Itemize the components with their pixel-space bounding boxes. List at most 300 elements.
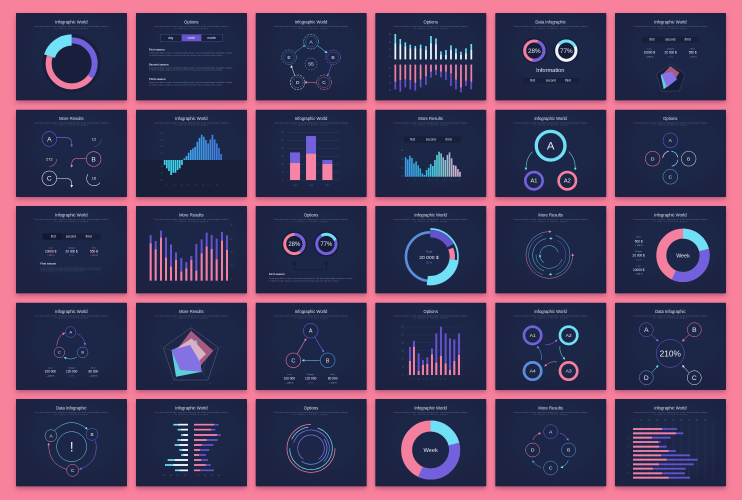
subtitle (34, 315, 109, 320)
stats: 20 000 $ (665, 51, 677, 55)
text block: second season: et dolore magna aliqua ut enim ad minim veniam quis nostrud exercitation (149, 69, 223, 72)
axis labels: 10 (161, 153, 163, 155)
stats: Next (91, 366, 96, 369)
axis labels: 90 (704, 420, 706, 422)
axis labels: 60 (680, 420, 682, 422)
axis labels: 3 (181, 184, 182, 186)
hub labels (644, 327, 697, 382)
values: 12 (92, 136, 97, 141)
node labels: 55 (308, 62, 314, 68)
stats: + 240 % (645, 56, 653, 58)
title: More Results (179, 212, 204, 217)
hub labels: A (644, 327, 649, 334)
panel: butterfly bars (136, 399, 247, 486)
stats: + 120 % (89, 375, 97, 377)
axis labels: 4 (422, 379, 423, 381)
axis labels: 60 (231, 238, 233, 240)
subtitle: Lorem ipsum dolor sit amet, consectetur adipiscing elit, sed do eiusmod tempor incididunt (394, 315, 468, 318)
axis labels (231, 225, 233, 281)
subtitle (514, 411, 588, 416)
subtitle: Lorem ipsum dolor sit amet, consectetur adipiscing elit, sed do eiusmod tempor incididunt (394, 218, 468, 221)
subtitle (274, 411, 349, 416)
axis labels: 3 (418, 379, 419, 381)
bar chart (406, 152, 460, 177)
axis labels: 0 (402, 375, 403, 377)
subtitle: Lorem ipsum dolor sit amet, consectetur adipiscing elit, sed do eiusmod tempor incididunt (34, 218, 109, 221)
tabs (160, 34, 223, 41)
node labels: C (58, 350, 61, 355)
node labels: A (47, 136, 52, 143)
axis labels: 5 (195, 184, 197, 186)
tabs: second (426, 138, 436, 142)
stacked column chart (287, 132, 340, 180)
axis labels: 6 (431, 379, 432, 381)
axis labels: 20 (161, 146, 163, 148)
panel: stacked thin columns (375, 303, 486, 390)
axis labels: 6 (444, 180, 445, 182)
title: Infographic World (414, 212, 448, 217)
tabs: third (446, 138, 452, 142)
node labels (58, 329, 84, 355)
horizontal bar chart (633, 423, 713, 479)
axis labels: 20 (204, 475, 206, 477)
text block: third season (149, 77, 232, 86)
stats: Budget (667, 47, 674, 50)
node labels: C (291, 358, 295, 364)
stats: + 120 % (689, 56, 697, 58)
axis labels: 1 (628, 429, 629, 431)
node labels: C (47, 176, 52, 183)
hub labels: B (692, 327, 697, 334)
stats (633, 236, 645, 276)
axis labels: 20 (389, 75, 391, 77)
axis labels: 2017 (325, 185, 329, 187)
stats (284, 373, 338, 384)
axis labels: 20 (401, 167, 403, 169)
axis labels: 10 (401, 176, 403, 178)
title: More Results (538, 212, 563, 217)
axis labels: 40 (402, 342, 404, 344)
subtitle (633, 411, 708, 416)
axis labels: 2 (174, 184, 175, 186)
text block: first season: First season (149, 48, 165, 52)
node labels: A1 (530, 333, 536, 339)
subtitle (154, 411, 229, 416)
axis labels: 4 (188, 184, 189, 186)
title: Infographic World (55, 19, 88, 24)
stats: + 120 % (329, 382, 337, 384)
node labels: C (669, 174, 673, 180)
tabs: first (649, 38, 655, 42)
subtitle: ut labore et dolore magna (654, 220, 687, 223)
axis labels: 2 (414, 180, 415, 182)
stats: 550 $ (90, 250, 98, 254)
subtitle: ut labore et dolore magna (55, 124, 88, 127)
subtitle: ut labore et dolore magna (294, 124, 328, 127)
node labels (291, 329, 330, 364)
subtitle: Lorem ipsum dolor sit amet, consectetur adipiscing elit, sed do eiusmod tempor incididunt (394, 122, 468, 125)
axis labels: 4 (221, 346, 222, 348)
axis labels: 3 (422, 180, 423, 182)
axis labels: 8 (216, 184, 218, 186)
axis labels: 7 (436, 379, 437, 381)
axis labels: 80 (231, 225, 233, 227)
node labels: A2 (564, 179, 571, 185)
stats: Next (330, 373, 335, 376)
subtitle: Lorem ipsum dolor sit amet, consectetur adipiscing elit, sed do eiusmod tempor incididunt (154, 25, 229, 28)
node labels: A3 (566, 369, 572, 375)
panel: exclamation cycle (16, 399, 127, 486)
stats: 12 % (636, 259, 641, 261)
subtitle (394, 122, 468, 127)
subtitle: ut labore et dolore magna (414, 27, 447, 30)
panel: four node loop (495, 399, 606, 486)
tree diagram (525, 131, 576, 189)
panel: two gauges with season text (256, 206, 367, 293)
node labels: B (91, 156, 96, 163)
panel: large radar chart (136, 303, 247, 390)
axis labels: 2 (171, 383, 173, 385)
left bars (165, 425, 188, 470)
hub labels: C (692, 375, 697, 382)
axis labels (163, 475, 220, 477)
title: Infographic World (295, 309, 328, 314)
node labels: C (71, 468, 75, 473)
subtitle (394, 315, 468, 320)
subtitle (514, 218, 588, 223)
node labels (531, 429, 571, 472)
subtitle (394, 25, 468, 30)
subtitle: ut labore et dolore magna (175, 124, 208, 127)
node labels: B (90, 432, 94, 437)
text block: first season: First season (269, 272, 285, 276)
gauge 28%: 28% (288, 242, 301, 248)
stats: 12 % (69, 375, 74, 377)
subtitle (274, 218, 349, 223)
gauge 28%: 28% (528, 48, 541, 55)
stats: 500 $ (635, 239, 643, 243)
subtitle: Lorem ipsum dolor sit amet, consectetur adipiscing elit, sed do eiusmod tempor incididunt (633, 218, 708, 221)
subtitle: ut labore et dolore magna (654, 27, 687, 30)
subtitle (274, 25, 349, 30)
panel: 210% hub (615, 303, 726, 390)
axis labels: 30 (402, 350, 404, 352)
subtitle: Lorem ipsum dolor sit amet, consectetur adipiscing elit, sed do eiusmod tempor incididunt (514, 411, 588, 414)
panel: triangle flow with stats (256, 303, 367, 390)
axis labels: 60 (282, 132, 284, 134)
triangle diagram (286, 323, 335, 368)
title: More Results (179, 309, 204, 314)
stats (45, 246, 98, 257)
axis labels: 40 (389, 34, 391, 36)
panel: mirrored bar chart (375, 13, 486, 100)
stats: 100 000 (45, 370, 56, 374)
axis labels: 10 (640, 420, 642, 422)
text block: first season (40, 261, 101, 273)
axis labels: 2 (413, 379, 414, 381)
title: Infographic World (654, 19, 687, 24)
stats: Last (287, 373, 292, 376)
panel: A B C flows (16, 110, 127, 197)
axis labels: 3 (209, 383, 211, 385)
axis labels: 20 (231, 265, 233, 267)
title: Infographic World (295, 116, 328, 121)
axis labels: 30 (401, 159, 403, 161)
panel: stacked columns (256, 110, 367, 197)
lower band (136, 160, 247, 197)
subtitle (633, 315, 708, 320)
axis labels: 4 (429, 180, 430, 182)
axis labels: 8 (458, 180, 459, 182)
subtitle: Lorem ipsum dolor sit amet, consectetur adipiscing elit, sed do eiusmod tempor incididunt (633, 411, 708, 414)
subtitle (274, 122, 349, 127)
subtitle: ut labore et dolore magna (55, 317, 88, 320)
subtitle (633, 122, 708, 127)
subtitle (394, 411, 468, 416)
title: More Results (418, 116, 443, 121)
node labels (531, 141, 571, 185)
subtitle: ut labore et dolore magna (534, 27, 567, 30)
axis labels: 20 (648, 420, 650, 422)
node labels: B (567, 448, 571, 454)
stats: 120 000 (305, 377, 317, 381)
axis labels: 30 (656, 420, 658, 422)
tabs: first (51, 235, 56, 239)
panel: large week donut (375, 399, 486, 486)
text block: first season: First season (40, 261, 56, 265)
text block: third season: Lorem ipsum dolor sit amet, consectetur adipiscing elit, sed do eiusmod tempor incididunt ut labore (149, 81, 232, 84)
stats: Next (636, 236, 641, 239)
axis labels: 20 (402, 358, 404, 360)
tabs: month (207, 36, 216, 40)
axis labels: 2015 (293, 185, 297, 187)
subtitle: Lorem ipsum dolor sit amet, consectetur adipiscing elit, sed do eiusmod tempor incididunt (633, 122, 708, 125)
axis labels (389, 34, 391, 92)
stats: 12 % (69, 255, 74, 257)
stats (45, 366, 98, 377)
tabs: third (565, 79, 571, 83)
axis labels: 7 (628, 455, 629, 457)
cycle diagram (282, 34, 340, 90)
node labels: C (322, 80, 326, 86)
axis labels: 30 (161, 139, 163, 141)
text block: first season: Lorem ipsum dolor sit amet, consectetur adipiscing elit, sed do eiusmod tempor incididunt ut labore (149, 52, 232, 55)
node labels: A (549, 429, 553, 435)
stats: 20 000 $ (633, 254, 645, 258)
subtitle (154, 122, 229, 127)
subtitle: ut labore et dolore magna (534, 220, 567, 223)
title: Infographic World (414, 405, 448, 410)
subtitle: Lorem ipsum dolor sit amet, consectetur adipiscing elit, sed do eiusmod tempor incididunt (274, 315, 349, 318)
panel: A splits into A1 and A2 (495, 110, 606, 197)
subtitle: Lorem ipsum dolor sit amet, consectetur adipiscing elit, sed do eiusmod tempor incididunt (514, 315, 588, 318)
node labels: A (309, 329, 313, 335)
subtitle: Lorem ipsum dolor sit amet, consectetur adipiscing elit, sed do eiusmod tempor incididunt (154, 122, 229, 125)
title: Data Infographic (655, 309, 686, 314)
title: Options (184, 19, 198, 24)
hub labels: 210% (660, 348, 682, 358)
text block: first season: Lorem ipsum dolor sit amet, consectetur adipiscing elit, sed do eiusmod (40, 266, 101, 269)
axis labels: 50 (402, 335, 404, 337)
node labels: A (49, 433, 53, 438)
axis labels: 0 (282, 180, 283, 182)
subtitle: ut labore et dolore magna (414, 317, 447, 320)
panel: four ring cycle (495, 303, 606, 390)
axis labels: 5 (427, 379, 428, 381)
axis labels: 2016 (309, 185, 313, 187)
text block: second season (149, 62, 232, 72)
center stats: 20 000 $ (419, 255, 439, 261)
axis labels: 20 (282, 164, 284, 166)
axis labels: 0 (633, 420, 634, 422)
donut chart (661, 234, 705, 277)
axis labels (161, 133, 218, 186)
node labels: A (309, 39, 313, 45)
tabs: day (168, 36, 174, 40)
panel: positive negative bars (136, 110, 247, 197)
cycle diagram (54, 327, 88, 359)
radar chart (656, 64, 685, 91)
stats: Last (637, 264, 641, 267)
axis labels: 30 (161, 179, 163, 181)
subtitle: ut labore et dolore magna (294, 220, 328, 223)
bar chart (165, 135, 221, 175)
tabs: first (530, 79, 535, 83)
stats: Budget (68, 246, 75, 249)
axis labels: 70 (688, 420, 690, 422)
title: Infographic World (295, 19, 328, 24)
text block: second season: Lorem ipsum dolor sit amet, consectetur adipiscing elit, sed do eiusmod tempor incididunt ut labore (149, 66, 232, 69)
cycle diagram (45, 423, 98, 476)
node labels: B (326, 358, 330, 364)
stats: 10000 $ (45, 250, 57, 254)
subtitle: Lorem ipsum dolor sit amet, consectetur adipiscing elit, sed do eiusmod tempor incididunt (514, 122, 588, 125)
node labels: E (287, 55, 291, 61)
text block: first season (269, 272, 353, 282)
tabs (642, 37, 699, 43)
stats: 20 000 $ (66, 250, 78, 254)
subtitle: Lorem ipsum dolor sit amet, consectetur adipiscing elit, sed do eiusmod tempor incididunt (274, 411, 349, 414)
panel: four nodes around arcs (615, 110, 726, 197)
panel: stats and week donut (615, 206, 726, 293)
axis labels: 0 (231, 279, 232, 281)
axis labels: 30 (389, 41, 391, 43)
subtitle: ut labore et dolore magna (294, 317, 328, 320)
stats: Budget (307, 373, 315, 376)
stats: + 240 % (285, 382, 293, 384)
subtitle: ut labore et dolore magna (414, 220, 447, 223)
title: More Results (538, 405, 563, 410)
node labels: C (549, 466, 553, 472)
axis labels (402, 327, 446, 381)
title: Options (423, 19, 438, 24)
subtitle: Lorem ipsum dolor sit amet, consectetur adipiscing elit, sed do eiusmod tempor incididunt (633, 315, 708, 318)
text block: first season: tempor incididunt ut labore et dolore magna aliqua ut enim ad minim (40, 268, 101, 271)
subtitle (514, 25, 588, 30)
node labels: A2 (566, 333, 572, 339)
stats: 10000 $ (633, 268, 645, 272)
node labels: B (687, 156, 691, 162)
panel: two ring gauges (495, 13, 606, 100)
axis labels: 7 (209, 184, 211, 186)
axis labels: 40 (161, 133, 163, 135)
node labels: B (81, 350, 84, 355)
title: More Results (59, 116, 84, 121)
subtitle: Lorem ipsum dolor sit amet, consectetur adipiscing elit, sed do eiusmod tempor incididunt (34, 25, 109, 28)
stacked bar chart (151, 231, 227, 281)
tabs (404, 136, 461, 143)
subtitle: Lorem ipsum dolor sit amet, consectetur adipiscing elit, sed do eiusmod tempor incididunt (633, 25, 708, 28)
title: Infographic World (534, 116, 568, 121)
subtitle: ut labore et dolore magna (175, 413, 208, 416)
panel: large stacked bars (136, 206, 247, 293)
stats: 120 000 (66, 370, 78, 374)
center stats: 25 % (426, 260, 433, 264)
axis labels: 10 (282, 172, 284, 174)
ring chart (287, 424, 335, 472)
subtitle (34, 25, 109, 30)
stats: Last (48, 366, 53, 369)
title: Data Infographic (535, 19, 566, 24)
node labels: A (547, 141, 555, 153)
gauge 77%: 77% (560, 48, 573, 55)
node labels: A1 (531, 179, 537, 185)
stats (644, 47, 697, 58)
axis labels: 7 (451, 180, 452, 182)
axis labels: 5 (190, 325, 192, 327)
panel: concentric arrow circles (495, 206, 606, 293)
stats: Last (49, 246, 53, 249)
subtitle (34, 411, 109, 416)
text block: third season: Third season (149, 77, 166, 81)
node labels: A (669, 138, 673, 144)
tabs: third (685, 38, 691, 42)
donut center label: Week (676, 253, 690, 259)
tabs: second (546, 79, 556, 83)
tabs: first (410, 138, 415, 142)
stats: Budget (68, 366, 75, 369)
title: Infographic World (654, 212, 687, 217)
node labels (49, 432, 94, 473)
tabs: week (188, 36, 195, 40)
subtitle (514, 122, 588, 127)
axis labels: 50 (672, 420, 674, 422)
stats: Next (92, 246, 97, 249)
values (46, 136, 97, 181)
axis labels: 10 (402, 366, 404, 368)
text block: first season: veniam quis nostrud exercitation ullamco (40, 270, 84, 273)
donut chart (42, 34, 101, 93)
subtitle: ut labore et dolore magna (414, 413, 447, 416)
axis labels: 6 (202, 184, 204, 186)
title: Infographic World (55, 212, 88, 217)
right bars (194, 425, 221, 470)
subtitle (154, 218, 229, 223)
axis labels (627, 420, 706, 475)
axis labels (160, 325, 222, 385)
node labels (47, 136, 96, 183)
stats: 80 000 (88, 370, 98, 374)
subtitle (394, 218, 468, 223)
text block: first season: et dolore magna aliqua ut enim ad minim veniam quis nostrud exercitation (149, 54, 223, 57)
node labels (651, 138, 691, 180)
axis labels: 5 (436, 180, 437, 182)
subtitle (34, 122, 109, 127)
panel: three node cycle with stats (16, 303, 127, 390)
node labels: B (331, 55, 335, 61)
donut chart (407, 426, 455, 474)
subtitle: ut labore et dolore magna (55, 27, 88, 30)
